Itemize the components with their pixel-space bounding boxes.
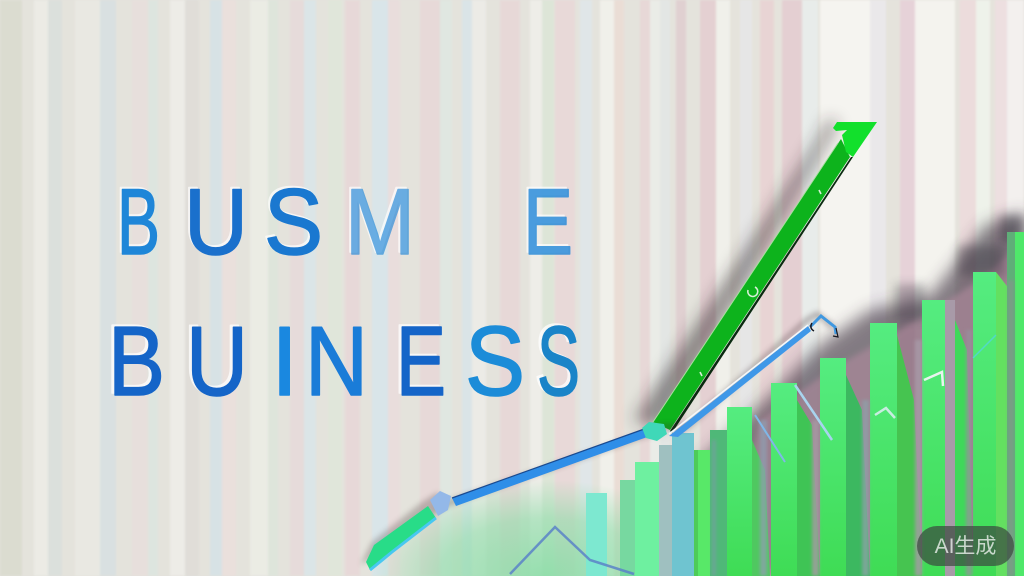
heading line 2: BUINESS: B	[105, 304, 162, 414]
heading line 2: BUINESS: S	[537, 306, 580, 416]
heading line 1: BUSM E: B	[115, 167, 158, 272]
heading line 2: BUINESS	[105, 304, 580, 416]
heading line 1: BUSM E: E	[523, 169, 573, 274]
heading line 2: BUINESS: S	[534, 304, 577, 414]
heading line 2: BUINESS: S	[465, 306, 525, 416]
heading line 2: BUINESS: U	[183, 304, 245, 414]
arrow rivets	[700, 190, 821, 376]
shadow band behind bars	[690, 212, 1024, 576]
heading line 2: BUINESS: E	[396, 306, 446, 416]
heading line 2: BUINESS: E	[393, 304, 443, 414]
green arrow	[634, 118, 877, 433]
heading line 1: BUSM E	[115, 167, 573, 274]
chart: bar gaps and highlights	[712, 280, 1014, 576]
badge: AI generated	[917, 526, 1014, 566]
heading line 1: BUSM E: U	[182, 167, 246, 272]
heading line 1: BUSM E: E	[521, 167, 571, 272]
chart: primary light-green bars	[586, 232, 1024, 576]
arrow base joint	[642, 422, 667, 441]
heading line 2: BUINESS: B	[108, 306, 165, 416]
heading line 1: BUSM E: U	[184, 169, 248, 274]
blue trend line	[437, 314, 838, 507]
heading line 1: BUSM E: B	[117, 169, 160, 274]
heading line 1: BUSM E: S	[262, 167, 321, 272]
heading line 2: BUINESS: N	[305, 306, 368, 416]
heading line 1: BUSM E: M	[343, 167, 413, 272]
heading line 2: BUINESS: I	[271, 306, 298, 416]
heading line 1: BUSM E: M	[345, 169, 415, 274]
lower-left pencil tip	[360, 491, 451, 570]
badge: AI generated: AI生成	[935, 535, 996, 558]
heading line 2: BUINESS: U	[186, 306, 248, 416]
soft green glow, bottom	[370, 480, 720, 576]
pale wash softening the stripes	[0, 0, 700, 576]
chevron line, bottom	[510, 527, 634, 574]
chart: secondary dark-green bars	[620, 232, 1015, 576]
heading line 1: BUSM E: S	[264, 169, 323, 274]
